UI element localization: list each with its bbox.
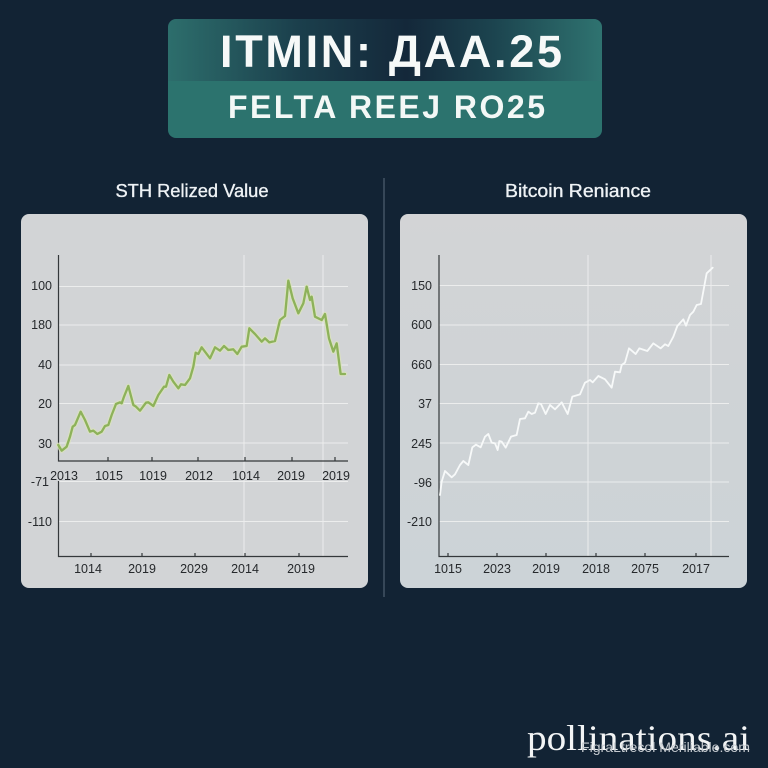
- y-axis labels: [407, 279, 432, 529]
- lower x-axis labels: 2019: [128, 562, 156, 576]
- y-axis labels: [28, 279, 52, 529]
- upper x-axis labels: 2012: [185, 469, 213, 483]
- panel: Bitcoin reliance chart: [400, 214, 747, 588]
- heading: Bitcoin Reniance: Bitcoin Reniance: [505, 181, 651, 201]
- line: green series: [58, 281, 345, 451]
- y-axis labels: 30: [38, 437, 52, 451]
- x-axis labels: 2017: [682, 562, 710, 576]
- lower x-axis labels: 2029: [180, 562, 208, 576]
- upper x-axis labels: 2019: [322, 469, 350, 483]
- upper x-axis labels: [50, 469, 350, 483]
- x-axis labels: 2075: [631, 562, 659, 576]
- y-axis labels: -71: [31, 475, 49, 489]
- y-axis labels: 660: [411, 358, 432, 372]
- panel: STH realized value chart: [21, 214, 368, 588]
- upper x-axis labels: 2019: [277, 469, 305, 483]
- x-axis labels: [434, 562, 710, 576]
- y-axis labels: 40: [38, 358, 52, 372]
- y-axis labels: 245: [411, 437, 432, 451]
- heading: STH Relized Value: STH Relized Value: [116, 181, 268, 201]
- axes: [439, 255, 729, 556]
- lower x-axis labels: 2014: [231, 562, 259, 576]
- axes: [58, 255, 348, 556]
- y-axis labels: -110: [28, 515, 52, 529]
- y-axis labels: -96: [414, 476, 432, 490]
- y-axis labels: 100: [31, 279, 52, 293]
- watermark caption: FigraLtrecol Meriliable.com: [581, 739, 750, 755]
- subtitle text: FELTA REEJ RO25: [228, 89, 545, 125]
- y-axis labels: 180: [31, 318, 52, 332]
- lower x-axis labels: 2019: [287, 562, 315, 576]
- title text: ITMIN: ДAA.25: [220, 26, 562, 77]
- y-axis labels: 37: [418, 397, 432, 411]
- y-axis labels: 600: [411, 318, 432, 332]
- x-axis labels: 2018: [582, 562, 610, 576]
- y-axis labels: 20: [38, 397, 52, 411]
- x-axis labels: 1015: [434, 562, 462, 576]
- upper x-axis labels: 2013: [50, 469, 78, 483]
- line: white series: [440, 268, 713, 495]
- lower x-axis labels: [74, 562, 315, 576]
- lower x-axis labels: 1014: [74, 562, 102, 576]
- upper x-axis labels: 1014: [232, 469, 260, 483]
- y-axis labels: 150: [411, 279, 432, 293]
- x-axis labels: 2023: [483, 562, 511, 576]
- y-axis labels: -210: [407, 515, 432, 529]
- title banner: [168, 19, 602, 138]
- x-axis labels: 2019: [532, 562, 560, 576]
- upper x-axis labels: 1015: [95, 469, 123, 483]
- center divider: [383, 178, 385, 597]
- watermark: pollinations.ai: [527, 718, 750, 758]
- upper x-axis labels: 1019: [139, 469, 167, 483]
